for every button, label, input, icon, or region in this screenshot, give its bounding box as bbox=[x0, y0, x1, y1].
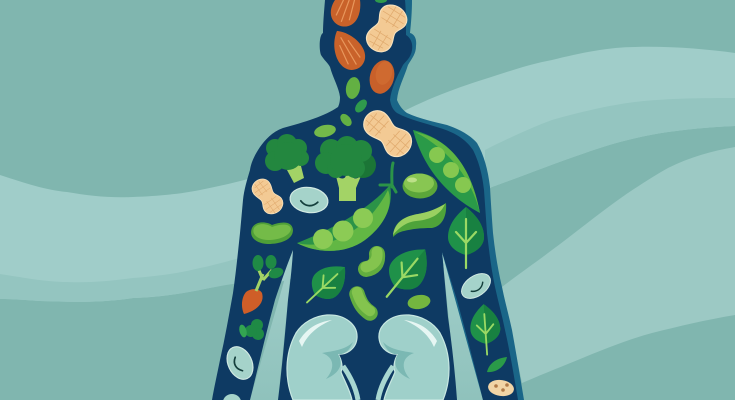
almond left bbox=[325, 24, 370, 75]
peanut in head bbox=[361, 0, 411, 57]
speckled nut bbox=[487, 378, 515, 398]
gap between left arm and torso bbox=[250, 250, 293, 400]
left arm foods bbox=[222, 255, 285, 400]
chest foods bbox=[248, 105, 484, 268]
kidney bean centre bbox=[366, 252, 377, 269]
small leaves in neck bbox=[313, 76, 369, 139]
kidneys bbox=[287, 315, 449, 400]
body silhouette bbox=[212, 0, 518, 400]
right kidney bbox=[378, 315, 449, 400]
background wave: band left and right bbox=[0, 47, 735, 302]
abdomen foods bbox=[297, 238, 439, 314]
background wave: lower right band bbox=[502, 147, 735, 383]
green bean right bbox=[402, 174, 438, 198]
background wave: mid tone left bbox=[0, 258, 240, 302]
pale bean bbox=[288, 185, 330, 215]
leaf right arm top bbox=[448, 207, 484, 268]
edamame pod bbox=[393, 203, 446, 237]
peanut left bbox=[248, 175, 287, 218]
small bean bbox=[406, 293, 432, 311]
small leaf at top of head bbox=[375, 0, 387, 3]
orange bean bbox=[366, 57, 398, 97]
pale bean right arm bbox=[457, 269, 495, 303]
pea pod right bbox=[413, 130, 480, 213]
leaf centre left bbox=[297, 256, 355, 314]
radish bbox=[242, 255, 285, 314]
small leaf bbox=[487, 357, 507, 372]
left kidney bbox=[287, 315, 358, 400]
leaf right arm lower bbox=[469, 303, 502, 356]
herb bbox=[238, 319, 264, 340]
background wave: mid tone right bbox=[485, 98, 735, 187]
kidney bean left bbox=[251, 222, 293, 244]
bean lower bbox=[357, 292, 370, 313]
broccoli left bbox=[265, 134, 309, 183]
pale bean bottom left bbox=[223, 394, 241, 400]
peanut on chest bbox=[358, 105, 417, 162]
broccoli centre bbox=[315, 136, 376, 201]
large pea pod centre bbox=[297, 163, 396, 251]
almond top bbox=[327, 0, 368, 31]
head foods bbox=[313, 0, 411, 139]
leaf centre right bbox=[373, 238, 439, 308]
gap between right arm and torso bbox=[442, 252, 483, 400]
pale bean lower left bbox=[222, 342, 258, 384]
right arm foods bbox=[457, 269, 515, 398]
body outer blue band bbox=[370, 0, 524, 400]
